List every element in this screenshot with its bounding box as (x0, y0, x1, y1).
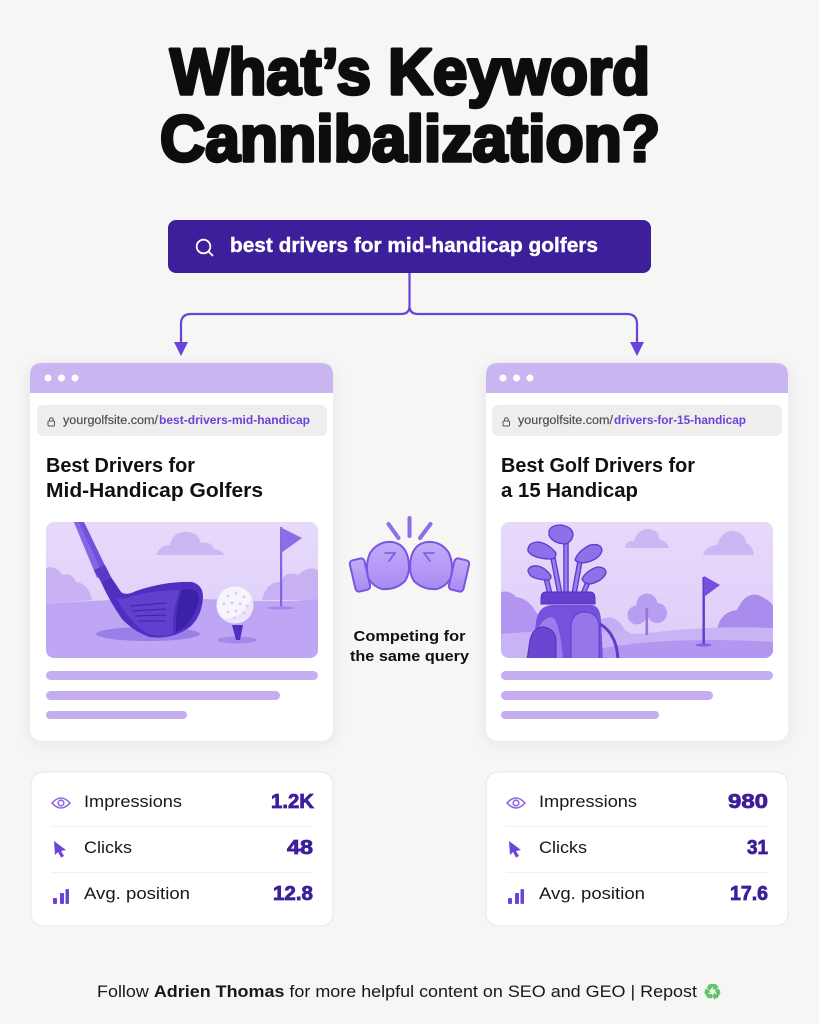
metric: clicks: 31 (747, 837, 768, 859)
url bar: yourgolfsite.com/ (63, 415, 159, 427)
illustration: golf bag and flag (501, 522, 773, 660)
metric: average position (53, 883, 313, 905)
search query text: best drivers for mid-handicap golfers (230, 234, 598, 257)
metric: average position: 17.6 (730, 883, 768, 905)
window dots (44, 374, 78, 382)
url bar (37, 405, 327, 436)
url bar: yourgolfsite.com/ (518, 415, 614, 427)
metric: impressions: 980 (728, 791, 768, 813)
panel: right page card (486, 363, 788, 741)
browser header (30, 363, 333, 393)
browser header (486, 363, 788, 393)
metric: average position: 12.8 (273, 883, 313, 905)
title (160, 35, 660, 175)
title: Cannibalization? (160, 102, 660, 175)
metric: impressions: Impressions (539, 792, 637, 811)
metric: impressions (52, 791, 315, 813)
arrows: query splits to both pages (174, 273, 644, 356)
caption: competing for the same query (350, 628, 470, 665)
footer credit: Follow Adrien Thomas for more helpful content on SEO and GEO | Repost (97, 983, 697, 1001)
caption: competing for the same query: the same query (350, 648, 470, 665)
title: What’s Keyword (170, 35, 650, 108)
placeholder text lines (501, 671, 773, 719)
metric: impressions: Impressions (84, 792, 182, 811)
page heading (46, 454, 263, 502)
window dots (500, 374, 534, 382)
metric: average position: Avg. position (539, 884, 645, 903)
metric: clicks (54, 837, 313, 859)
icon: recycle symbol: ♻ (703, 980, 722, 1004)
placeholder text lines (46, 671, 318, 719)
page heading: a 15 Handicap (501, 479, 638, 502)
metric: clicks: 48 (287, 837, 313, 859)
caption: competing for the same query: Competing for (354, 628, 466, 645)
metric: impressions (507, 791, 768, 813)
panel: left page card (30, 363, 333, 741)
footer credit (97, 980, 722, 1004)
page heading: Mid-Handicap Golfers (46, 479, 263, 502)
metric: average position (508, 883, 768, 905)
metric: impressions: 1.2K (271, 791, 315, 813)
metric: clicks: Clicks (84, 838, 132, 857)
panel: left metrics (31, 772, 333, 926)
url bar: best-drivers-mid-handicap (159, 415, 310, 427)
metric: clicks (509, 837, 768, 859)
icon: boxing gloves clash (349, 518, 470, 592)
page heading: Best Drivers for (46, 454, 195, 477)
panel: right metrics (486, 772, 788, 926)
page heading: Best Golf Drivers for (501, 454, 695, 477)
search bar (168, 220, 651, 273)
url bar (492, 405, 782, 436)
icon: magnifying glass (197, 240, 212, 256)
metric: clicks: Clicks (539, 838, 587, 857)
page heading (501, 454, 695, 502)
url bar: drivers-for-15-handicap (614, 415, 746, 427)
illustration: golf driver and ball (46, 520, 318, 658)
metric: average position: Avg. position (84, 884, 190, 903)
